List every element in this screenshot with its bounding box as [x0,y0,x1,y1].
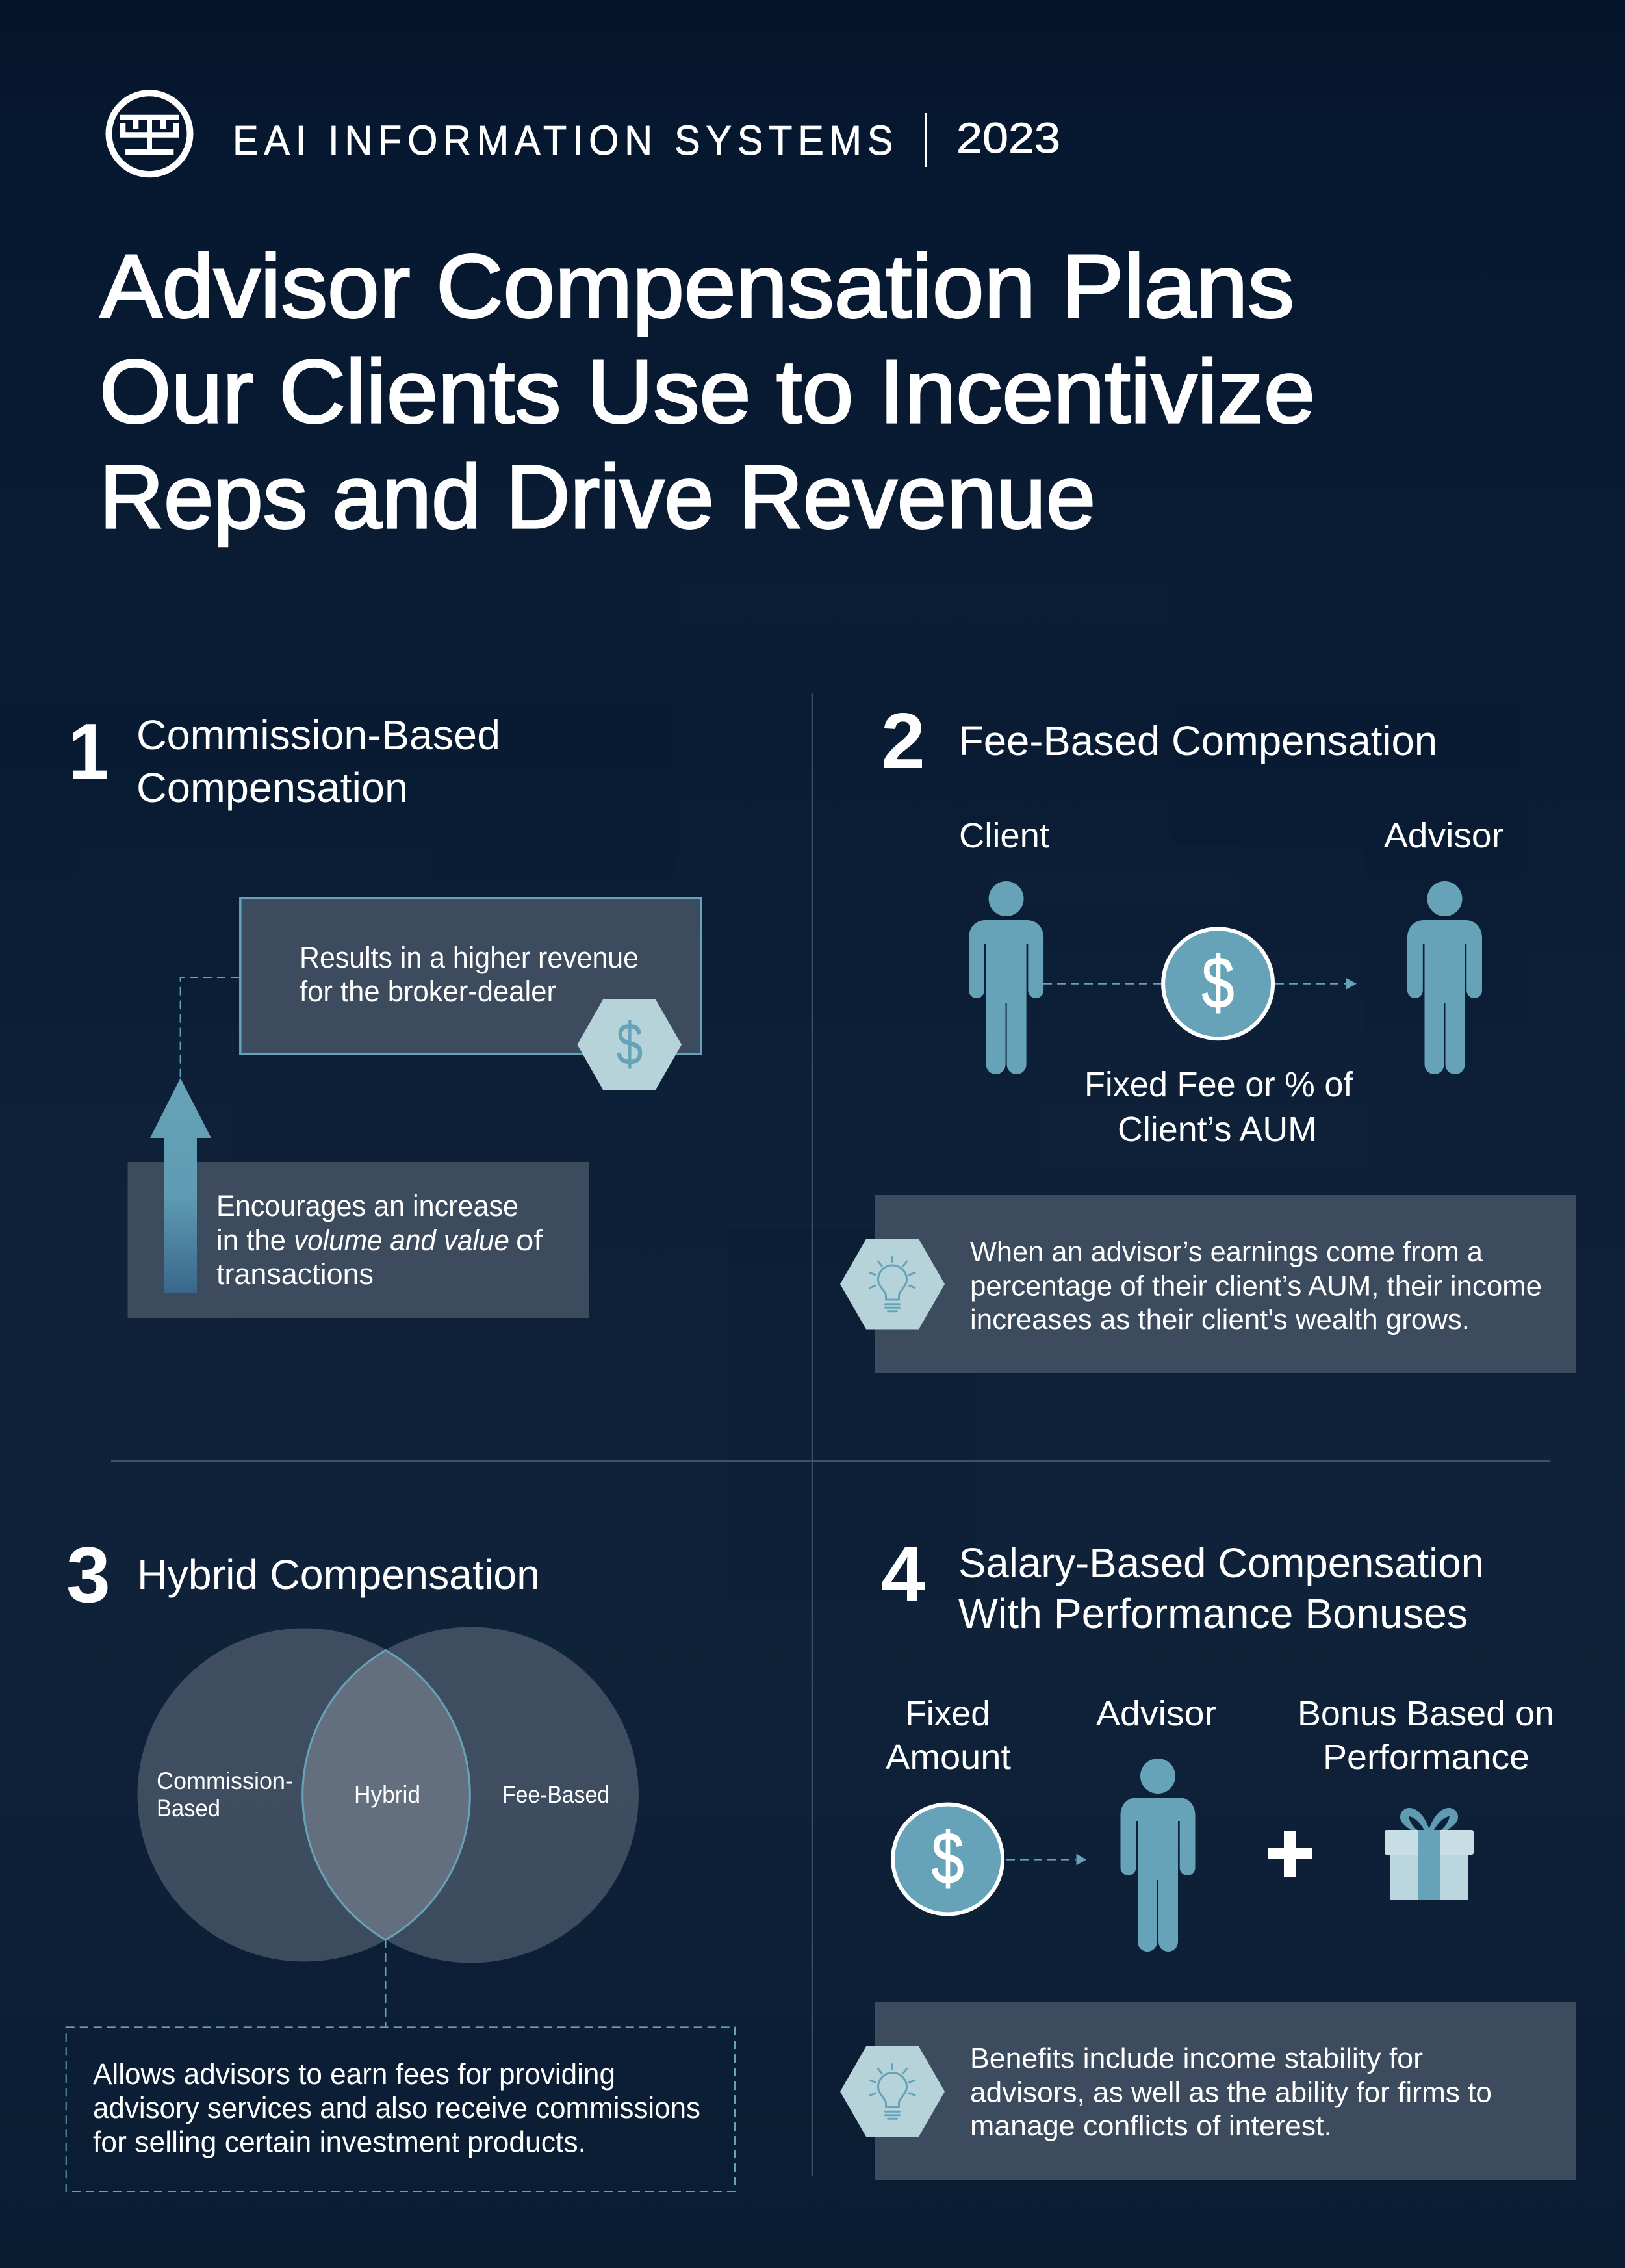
title: Advisor Compensation Plans [100,237,1294,337]
icon: client person [969,881,1043,1074]
callout: higher revenue: for the broker-dealer [300,975,556,1008]
section number 2: 2 [881,697,925,785]
venn label: fee: Fee-Based [502,1781,609,1808]
callout: AUM income: When an advisor’s earnings come from a [970,1236,1483,1268]
callout: increase in volume: in the [216,1224,286,1257]
heading: hybrid: Hybrid Compensation [137,1551,540,1598]
label: fixed amount: Amount [886,1738,1011,1777]
icon: dollar coin [1163,929,1273,1038]
icon: company logo [109,93,190,174]
panel: hybrid compensation [66,1530,735,2191]
heading: commission-based: Commission-Based [136,712,500,758]
icon: dollar coin: $ [1202,943,1235,1024]
callout: increase in volume: transactions [216,1257,374,1291]
header: logo and brand line [109,93,1060,174]
callout: higher revenue [240,898,701,1054]
dashed connector [181,977,239,1078]
panel: fee-based compensation [840,697,1576,1373]
panel: salary-based compensation [840,1530,1576,2180]
icon: dollar hexagon: $ [617,1011,643,1077]
label: fixed fee [1084,1065,1353,1149]
venn label: hybrid: Hybrid [354,1781,420,1808]
callout: benefits: advisors, as well as the ability for firms to [970,2077,1492,2108]
icon: dollar coin [893,1804,1003,1914]
label: advisor: Advisor [1096,1694,1216,1733]
year: 2023 [956,114,1060,162]
callout: benefits: manage conflicts of interest. [970,2110,1332,2142]
venn: fee circle [303,1627,639,1963]
section number 4: 4 [881,1530,925,1618]
callout: benefits: Benefits include income stability for [970,2042,1423,2074]
heading: salary-based: With Performance Bonuses [958,1590,1468,1637]
heading: commission-based: Compensation [136,764,408,811]
callout: AUM income [875,1195,1576,1373]
venn label: commission: Commission- [157,1768,293,1794]
arrow: fee flow [1043,977,1357,990]
callout: AUM income: increases as their client's wealth grows. [970,1304,1470,1335]
heading: commission-based [136,712,500,811]
icon: lightbulb hexagon [840,2046,945,2137]
callout: dashed description box: advisory services and also receive commissions [93,2091,700,2124]
callout: dashed description box: for selling certain investment products. [93,2125,586,2159]
venn: commission circle [138,1629,470,1961]
callout: increase in volume: of [516,1224,543,1257]
label: advisor: Advisor [1384,816,1503,855]
label: bonus: Bonus Based on [1298,1694,1554,1733]
callout: dashed description box: Allows advisors to earn fees for providing [93,2057,615,2091]
dashed connector [385,1940,386,2027]
callout: higher revenue: Results in a higher revenue [300,941,639,974]
title [99,237,1315,547]
callout: increase in volume: Encourages an increase [216,1189,518,1222]
label: client: Client [959,816,1049,855]
callout: AUM income: percentage of their client’s AUM, their income [970,1270,1542,1302]
callout: benefits [875,2002,1576,2180]
callout: dashed description box [66,2027,735,2191]
title: Our Clients Use to Incentivize [99,342,1315,442]
heading: salary-based: Salary-Based Compensation [958,1540,1484,1586]
company name: EAI INFORMATION SYSTEMS [233,118,893,164]
icon: lightbulb hexagon [840,1239,945,1330]
label: bonus: Performance [1323,1738,1529,1777]
heading: fee-based: Fee-Based Compensation [958,717,1437,764]
venn label: commission [157,1768,293,1822]
panel: commission-based compensation [68,706,701,1318]
label: fixed fee: Client’s AUM [1118,1110,1317,1149]
callout: increase in volume [127,1162,589,1318]
callout: increase in volume: volume and value [294,1224,509,1257]
arrow: salary flow [1006,1853,1086,1865]
venn label: commission: Based [157,1795,220,1822]
label: fixed fee: Fixed Fee or % of [1084,1065,1353,1104]
section number 3: 3 [66,1530,110,1619]
label: fixed amount [886,1694,1011,1777]
title: Reps and Drive Revenue [99,447,1095,547]
icon: gift box [1385,1808,1474,1900]
icon: advisor person [1120,1759,1196,1952]
icon: dollar coin: $ [932,1818,964,1899]
venn: overlap [303,1651,470,1940]
heading: salary-based [958,1540,1484,1637]
arrow: up [150,1078,211,1293]
label: bonus [1298,1694,1554,1777]
icon: advisor person [1407,881,1482,1074]
icon: plus sign [1268,1831,1312,1877]
venn diagram [138,1627,639,1963]
icon: dollar hexagon [577,999,682,1090]
label: fixed amount: Fixed [905,1694,990,1733]
section number 1: 1 [68,706,109,795]
